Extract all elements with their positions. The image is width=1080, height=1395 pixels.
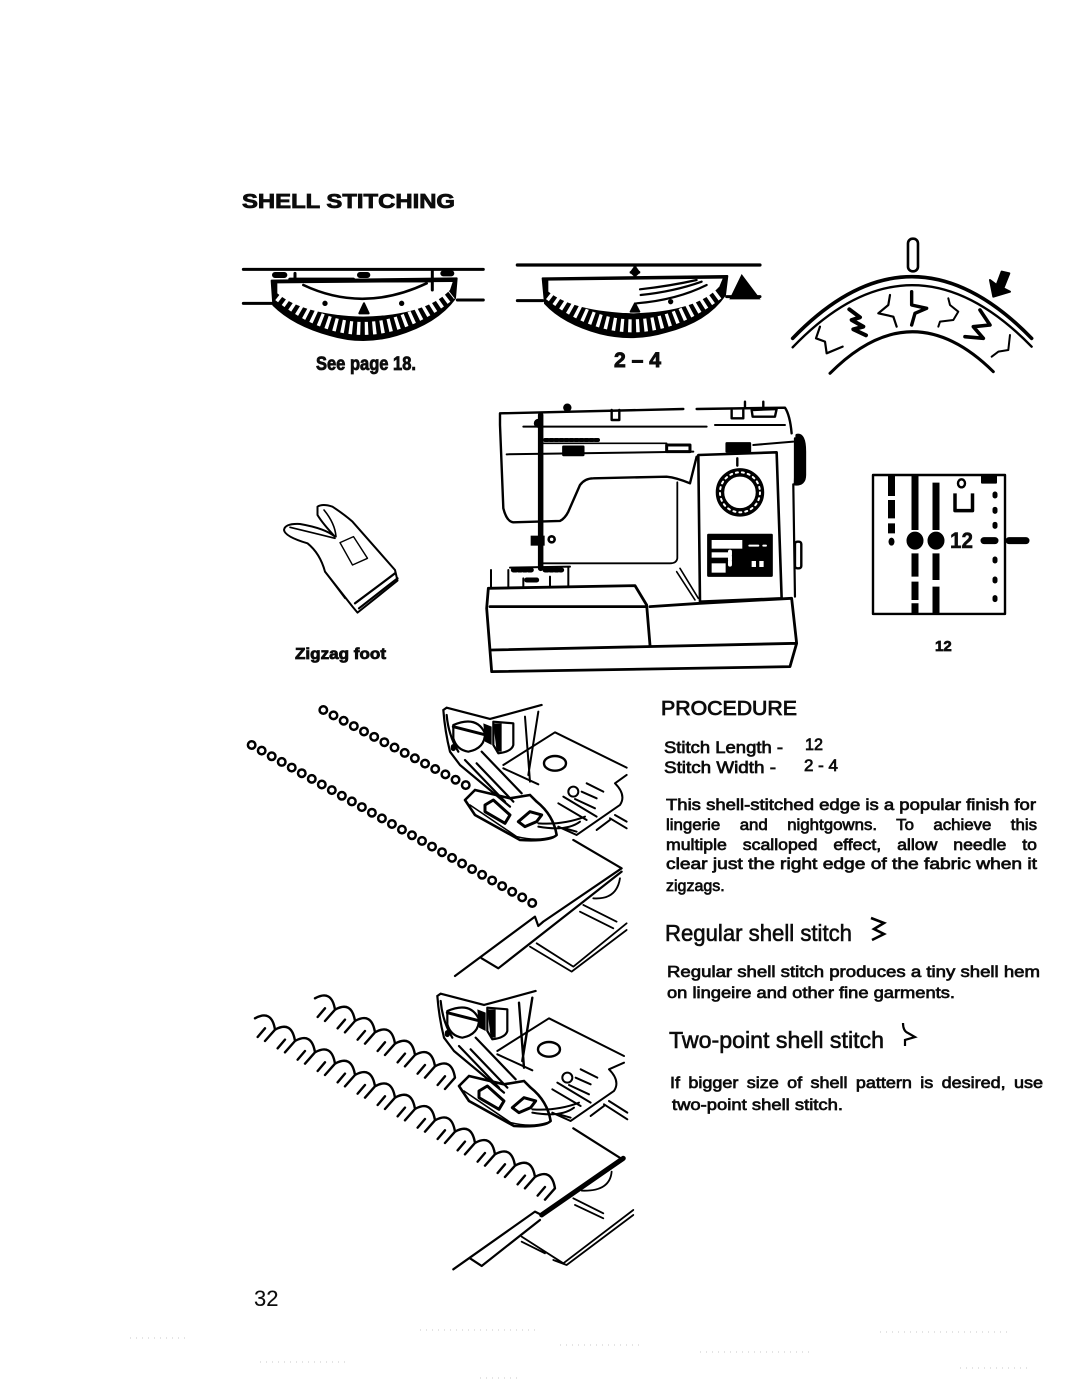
procedure description: zigzags. [666, 878, 725, 895]
icon: regular shell stitch [871, 918, 884, 940]
chain stitching [252, 745, 542, 908]
stitch selector arc [793, 239, 1032, 373]
procedure description: lingerie and nightgowns. To achieve this [666, 817, 1037, 834]
procedure description [666, 797, 1038, 895]
presser foot: upper [443, 705, 627, 840]
scalloped edging lower row [255, 1015, 555, 1200]
sewing plate below [522, 1198, 633, 1265]
procedure description: multiple scalloped effect, allow needle to [666, 837, 1037, 854]
stitch settings: 2 - 4 [804, 757, 838, 775]
procedure heading: PROCEDURE [661, 698, 797, 720]
page number: 32 [254, 1286, 278, 1311]
dial caption: see page: See page 18. [316, 354, 416, 375]
scalloped edging upper row [315, 995, 455, 1089]
presser foot: lower [437, 991, 627, 1126]
two-point shell stitch description [670, 1075, 1043, 1114]
regular shell stitch description: on lingeire and other fine garments. [667, 985, 955, 1002]
two-point shell stitch description: If bigger size of shell pattern is desired, use [670, 1075, 1043, 1092]
needle bar [538, 415, 543, 568]
stitch settings: Stitch Width - [664, 759, 776, 777]
illustration: two-point shell stitch sewing [255, 995, 633, 1269]
column panel [698, 452, 782, 602]
arch interior [543, 482, 677, 563]
stitch settings: 12 [805, 736, 823, 754]
procedure description: This shell-stitched edge is a popular finish for [666, 797, 1037, 814]
stitch pattern panel [873, 475, 1026, 614]
sewing machine [487, 402, 805, 672]
panel number: 12 [950, 528, 973, 553]
panel caption: 12 [935, 638, 952, 655]
machine top details [507, 425, 785, 454]
procedure description: clear just the right edge of the fabric when it [666, 856, 1038, 873]
illustration: regular shell stitch sewing [252, 710, 627, 976]
stitch settings [664, 736, 838, 777]
fabric edges [453, 1128, 623, 1269]
zigzag foot icon [284, 505, 398, 613]
foot caption: Zigzag foot [295, 646, 387, 663]
stitch dial [720, 472, 760, 512]
machine base [487, 586, 797, 672]
title: SHELL STITCHING [242, 191, 455, 213]
stitch length dial [243, 269, 483, 340]
regular shell stitch heading: Regular shell stitch [665, 920, 852, 946]
machine head outline [500, 408, 792, 522]
fabric edges [455, 840, 622, 976]
needle plate [510, 566, 570, 569]
two-point shell stitch description: two-point shell stitch. [672, 1097, 843, 1114]
dial caption: width range: 2 – 4 [614, 349, 661, 372]
handwheel [795, 435, 805, 484]
regular shell stitch description [667, 964, 1040, 1002]
two-point shell stitch heading: Two-point shell stitch [669, 1027, 884, 1053]
regular shell stitch description: Regular shell stitch produces a tiny shell hem [667, 964, 1040, 981]
control panel [708, 535, 772, 576]
sewing plate below [530, 905, 627, 972]
icon: two-point shell stitch [903, 1023, 915, 1046]
stitch settings: Stitch Length - [664, 739, 783, 757]
stitch width dial [517, 265, 761, 337]
